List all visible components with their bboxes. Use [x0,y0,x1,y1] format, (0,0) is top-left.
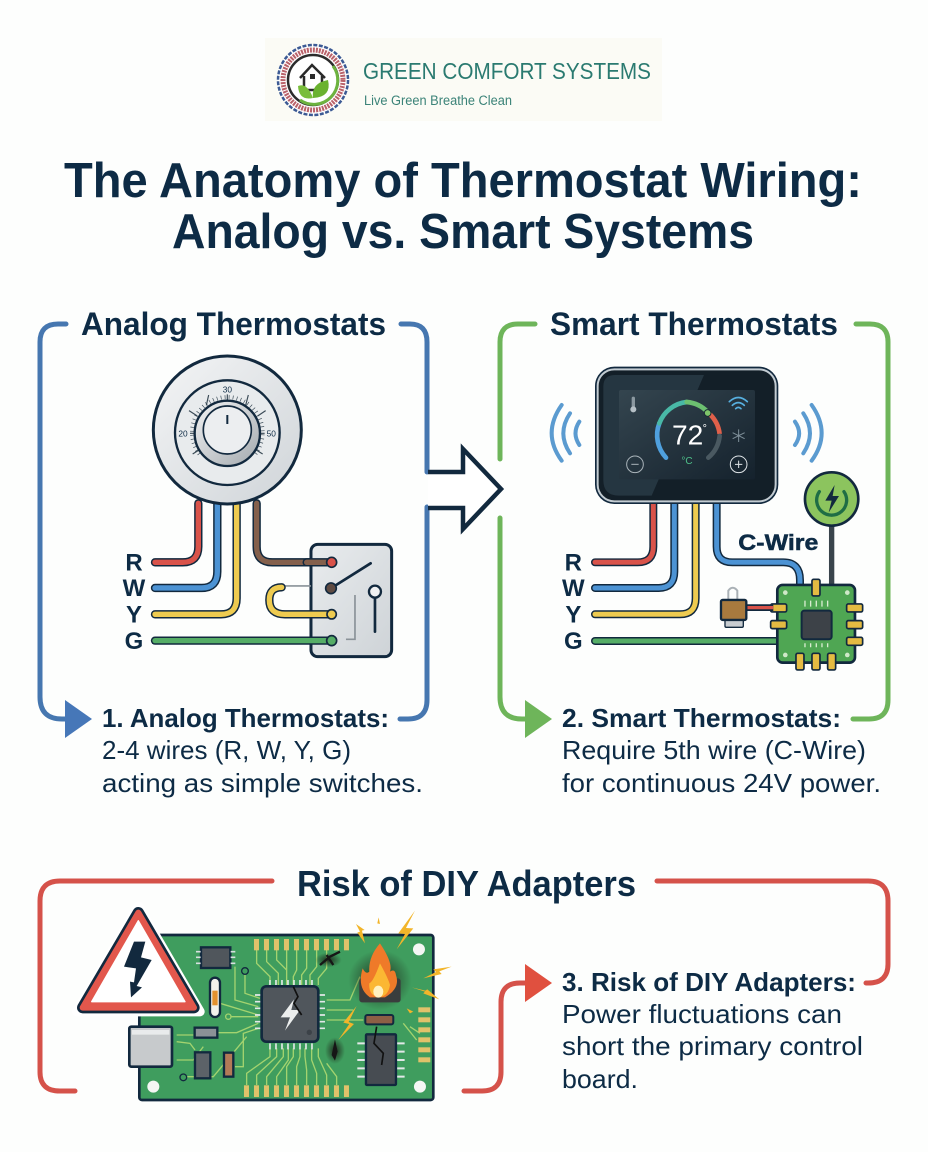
wire labels: analog: R [125,550,143,577]
device: smart thermostat: °C [681,456,693,467]
company name: GREEN COMFORT SYSTEMS [363,58,651,84]
caption: risk [562,967,863,1094]
panel: smart thermostats [500,306,888,798]
wires: terminal connections [155,557,337,646]
wire labels: smart: Y [565,601,581,628]
snow icon [733,429,745,442]
lower right chip [357,1015,405,1085]
caption: risk: board. [562,1064,638,1094]
burnt component with flame [359,943,401,1002]
wire labels: analog: Y [126,601,142,628]
gauge [657,402,720,458]
panel: risk of DIY adapters [40,863,888,1100]
logo banner [265,38,662,121]
arrowhead: red [525,964,552,1002]
thermometer icon [630,397,636,412]
main chip [255,980,325,1049]
wire labels: smart: R [565,550,582,577]
small components [195,947,233,1078]
control chip board [771,579,863,670]
wire labels: analog: W [123,575,146,602]
caption: analog: 1. Analog Thermostats: [102,703,389,733]
dial: analog thermostat: 30 [223,385,232,395]
dial: analog thermostat: 50 [267,429,276,439]
wire labels: smart: W [562,575,585,602]
heading: risk: Risk of DIY Adapters [297,863,636,904]
panel frame: green bracket [500,324,888,719]
title [64,154,862,259]
burn marks [315,950,412,1064]
board [139,935,433,1100]
illustration: smart wiring [552,367,863,670]
arrowhead: green [525,700,552,738]
title: The Anatomy of Thermostat Wiring: [64,154,862,208]
caption: smart: 2. Smart Thermostats: [562,703,841,733]
wires: analog [155,503,310,614]
heading: smart: Smart Thermostats [550,306,838,342]
illustration: damaged circuit board [77,906,452,1100]
tagline: Live Green Breathe Clean [364,93,512,108]
wires: smart [595,503,832,641]
caption: analog: 2-4 wires (R, W, Y, G) [102,735,351,765]
panel frame: red bracket [40,881,888,1091]
wire labels: analog: G [125,628,143,655]
caption: smart: for continuous 24V power. [562,768,881,798]
port connector [129,1027,172,1067]
label: C-Wire: C-Wire [738,530,818,555]
arrow: analog to smart [428,449,501,529]
wire labels: analog [123,550,146,655]
caption: risk: short the primary control [562,1031,863,1061]
traces [177,950,420,1085]
wire labels: smart: G [564,628,583,655]
caption: risk: 3. Risk of DIY Adapters: [562,967,856,997]
icon: power indicator [805,472,858,526]
heading: analog: Analog Thermostats [81,306,386,342]
device: smart thermostat [595,367,778,504]
illustration: analog wiring [123,356,392,657]
sparks [338,911,452,1040]
wifi icon [729,397,747,409]
device: smart thermostat: ° [703,423,707,435]
minus button [627,456,643,473]
warning triangle [77,906,200,1012]
panel: analog thermostats [40,306,427,798]
signal waves [552,405,822,461]
caption: smart: Require 5th wire (C-Wire) [562,735,866,765]
dial: analog thermostat: 20 [178,429,188,439]
wire labels: smart [562,550,585,655]
logo emblem [278,45,348,115]
dial: analog thermostat [153,356,301,504]
arrowhead: blue [65,700,92,738]
icon: fuse connector [721,588,773,627]
panel frame: blue bracket [40,324,427,719]
caption: analog [102,703,423,798]
switch box [285,544,392,657]
mounting holes [147,943,426,1093]
caption: smart [562,703,881,798]
title: Analog vs. Smart Systems [172,205,754,259]
plus button [730,456,747,473]
caption: analog: acting as simple switches. [102,768,423,798]
device: smart thermostat: 72 [672,420,703,451]
caption: risk: Power fluctuations can [562,999,842,1029]
gold pads [244,939,430,1097]
